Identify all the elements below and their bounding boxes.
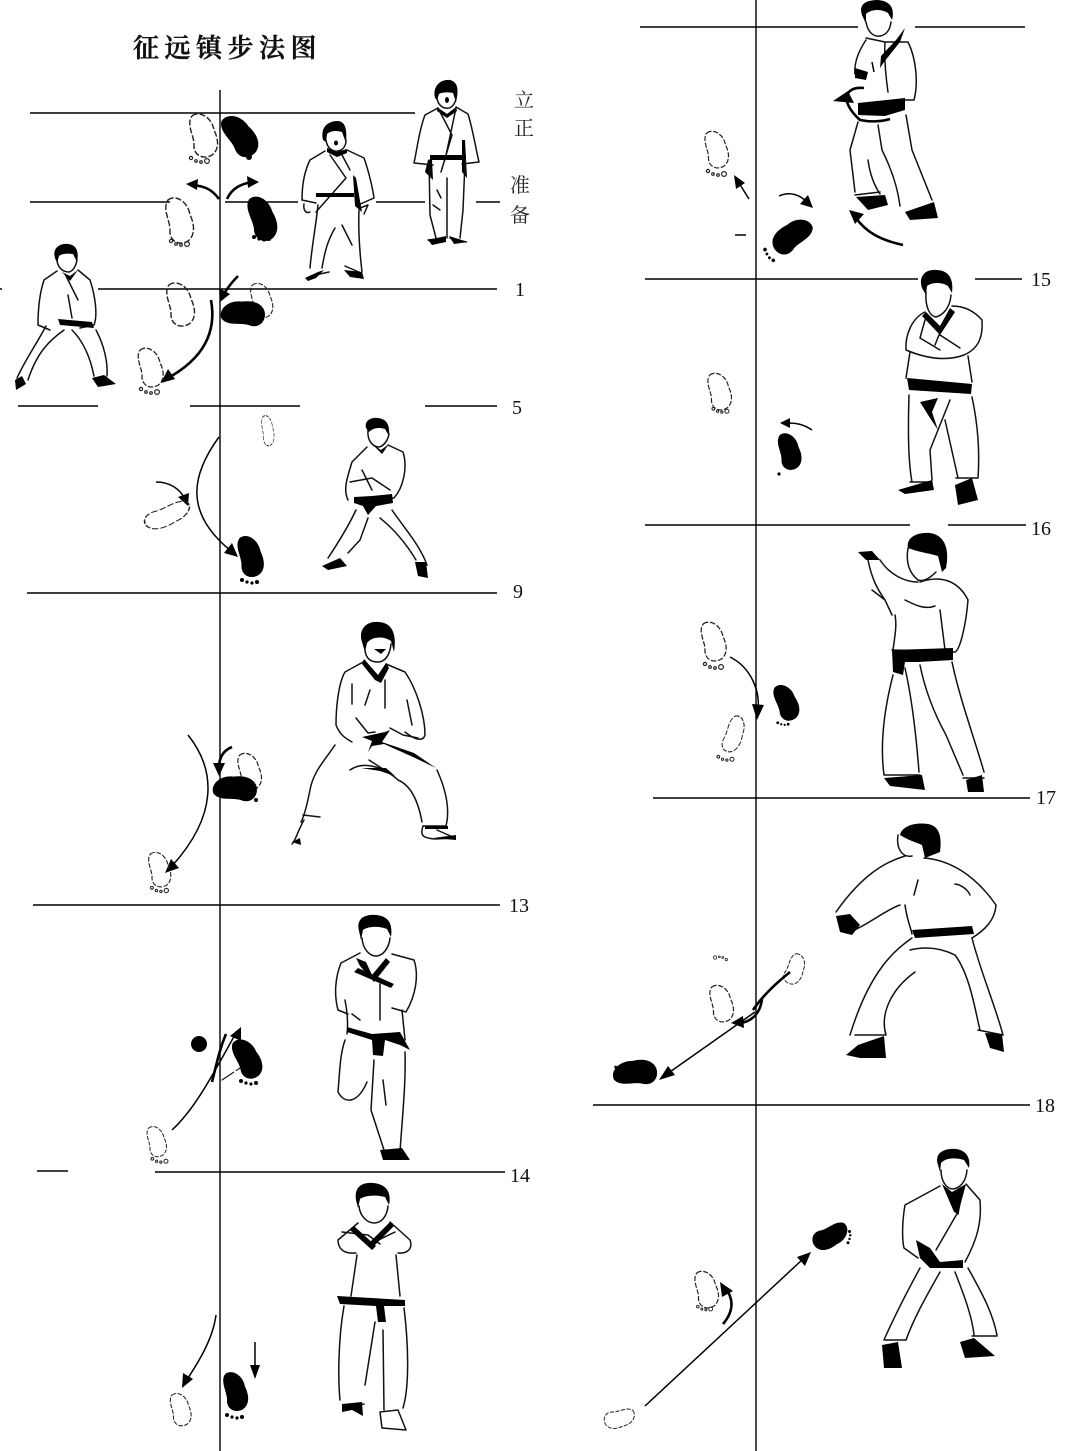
footwork: step 15 [708,373,812,476]
footwork: step 18 [604,1221,851,1428]
side labels and step numbers: 9 [513,581,523,603]
figure: step 14 pose [337,1183,411,1430]
figure: top right pose with rotation arrows [833,0,938,245]
side labels and step numbers: 正 [514,118,534,140]
side labels and step numbers: 13 [509,895,529,917]
figure: ready stance [302,121,374,281]
footwork: step 1 [138,276,273,394]
right column ruled timeline [593,0,1030,1451]
side labels and step numbers: 立 [514,89,534,112]
side labels and step numbers: 15 [1031,269,1051,291]
side labels and step numbers [509,89,1056,1187]
side labels and step numbers: 备 [510,204,530,227]
figure: standing at attention [414,80,479,245]
figure: step 15 pose [898,270,982,505]
side labels and step numbers: 17 [1036,787,1056,809]
side labels and step numbers: 16 [1031,518,1051,540]
side labels and step numbers: 5 [512,397,522,419]
footwork: step 17 [611,952,812,1090]
figure: step 5 pose [322,418,428,578]
figure: step 13 pose [336,915,416,1160]
figure: step 1 pose [15,244,116,390]
footwork: top right step [705,131,816,263]
footwork: step 5 [142,416,274,585]
figure: step 9 pose [292,622,456,845]
figure: step 16 pose [858,533,984,792]
footwork: standing to ready [166,109,279,246]
footwork: step 16 [701,622,801,761]
side labels and step numbers: 14 [510,1165,530,1187]
side labels and step numbers: 准 [510,174,530,197]
left column ruled timeline [0,90,505,1451]
side labels and step numbers: 18 [1035,1095,1055,1117]
side labels and step numbers: 1 [515,279,525,301]
footwork: step 14 [170,1315,260,1426]
figure: step 17 pose [836,823,1004,1058]
title: 征远镇步法图 [133,34,322,63]
footwork: step 9 [149,735,262,893]
footwork: step 13 [147,1027,265,1163]
figure: step 18 pose [882,1149,997,1368]
